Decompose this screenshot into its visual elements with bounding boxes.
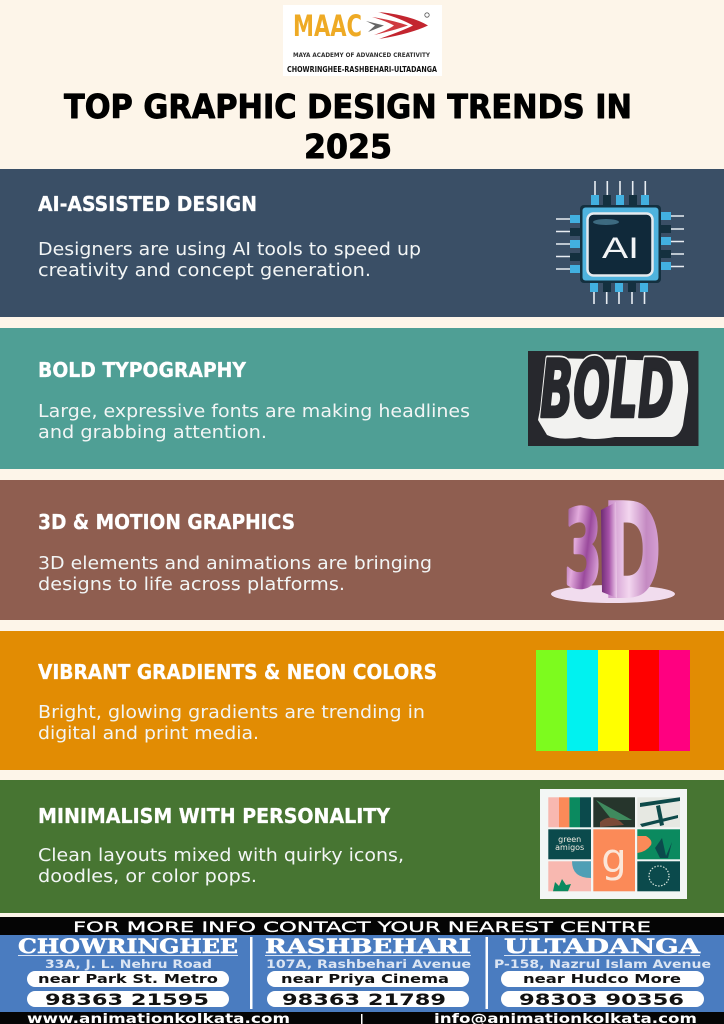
text: minimalism description — [38, 846, 404, 887]
footer heading: FOR MORE INFO CONTACT YOUR NEAREST CENTRE — [73, 920, 651, 936]
centre: Rashbehari — [265, 935, 471, 1009]
icon: brand moodboard: green — [558, 835, 581, 844]
title: TOP GRAPHIC DESIGN TRENDS IN — [64, 87, 632, 126]
panel: bold typography — [0, 328, 724, 469]
centre: Ultadanga: near Hudco More — [523, 971, 681, 986]
centre: Rashbehari: 98363 21789 — [282, 990, 446, 1009]
panel: minimalism with personality — [0, 780, 724, 913]
text: 3D description: 3D elements and animations are bringing — [38, 554, 432, 574]
panel: AI-assisted design — [0, 169, 724, 317]
icon: brand moodboard: g — [601, 836, 627, 882]
icon: AI chip — [556, 181, 684, 304]
text: AI-assisted description: creativity and concept generation. — [38, 261, 371, 281]
panel: vibrant gradients and neon colors — [0, 631, 724, 770]
text: gradients description: digital and print media. — [38, 724, 259, 744]
icon: 3D lettering: D — [603, 478, 661, 627]
centre: Chowringhee — [18, 935, 238, 1009]
title: 2025 — [304, 127, 392, 166]
centre: Chowringhee: CHOWRINGHEE — [18, 935, 238, 958]
text: AI-assisted description — [38, 240, 421, 281]
text: 3D description: designs to life across platforms. — [38, 575, 345, 595]
centre: Ultadanga: 98303 90356 — [519, 990, 684, 1009]
icon: 3D lettering: 3 — [564, 488, 602, 611]
centre: Ultadanga: ULTADANGA — [504, 935, 701, 958]
text: 3D description — [38, 554, 432, 595]
heading: minimalism with personality: MINIMALISM WITH PERSONALITY — [38, 804, 391, 828]
centre: Rashbehari: RASHBEHARI — [265, 935, 471, 958]
centre: Ultadanga: P-158, Nazrul Islam Avenue — [494, 957, 711, 971]
icon: 3D lettering — [551, 478, 675, 627]
heading: bold typography: BOLD TYPOGRAPHY — [38, 358, 247, 382]
heading: AI-assisted design: AI-ASSISTED DESIGN — [38, 192, 257, 216]
text: gradients description: Bright, glowing gradients are trending in — [38, 703, 425, 723]
text: minimalism description: Clean layouts mixed with quirky icons, — [38, 846, 404, 866]
title — [64, 87, 632, 166]
text: bold typography description: Large, expressive fonts are making headlines — [38, 402, 470, 422]
text: minimalism description: doodles, or color pops. — [38, 867, 257, 887]
text: AI-assisted description: Designers are using AI tools to speed up — [38, 240, 421, 260]
centre: Rashbehari: near Priya Cinema — [281, 971, 449, 986]
heading: 3D and motion graphics: 3D & MOTION GRAPHICS — [38, 510, 295, 534]
footer: contact banner — [0, 917, 724, 1024]
heading: vibrant gradients and neon colors: VIBRANT GRADIENTS & NEON COLORS — [38, 660, 437, 684]
panel: 3D and motion graphics — [0, 478, 724, 627]
text: bold typography description: and grabbing attention. — [38, 423, 267, 443]
centre: Chowringhee: 33A, J. L. Nehru Road — [45, 957, 212, 971]
centre: Ultadanga — [494, 935, 711, 1009]
centre: Chowringhee: near Park St. Metro — [38, 971, 219, 986]
footer website and email — [27, 1011, 697, 1024]
centre: Chowringhee: 98363 21595 — [45, 990, 209, 1009]
text: gradients description — [38, 703, 425, 744]
logo: MAAC: MAYA ACADEMY OF ADVANCED CREATIVITY — [293, 51, 430, 59]
logo: MAAC — [283, 5, 442, 76]
centre: Rashbehari: 107A, Rashbehari Avenue — [266, 957, 471, 971]
icon: brand moodboard — [540, 789, 687, 899]
logo: MAAC: CHOWRINGHEE-RASHBEHARI-ULTADANGA — [287, 65, 438, 74]
text: bold typography description — [38, 402, 470, 443]
icon: neon colour stripes — [536, 650, 690, 751]
icon: AI chip: AI — [602, 232, 639, 265]
icon: brand moodboard: amigos — [555, 843, 584, 852]
logo: MAAC: MAAC — [293, 9, 362, 43]
